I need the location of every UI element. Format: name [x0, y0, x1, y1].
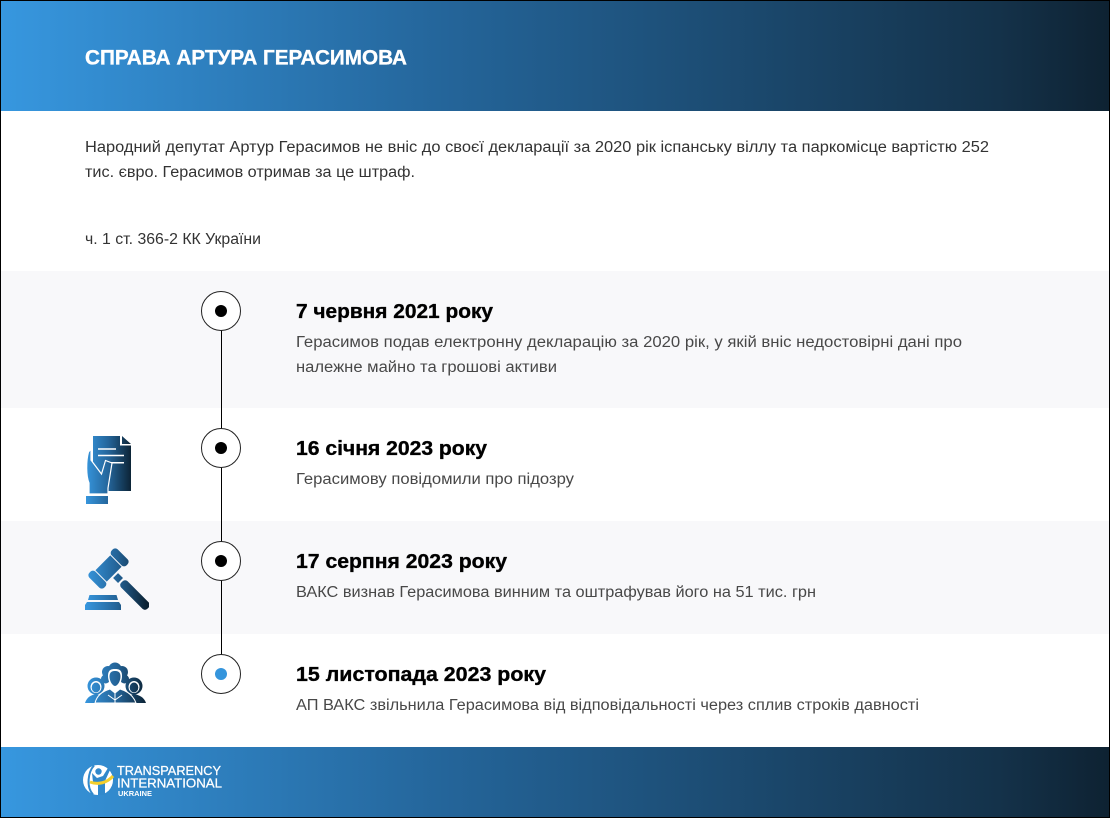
title: СПРАВА АРТУРА ГЕРАСИМОВА	[85, 46, 407, 70]
description 3: ВАКС визнав Герасимова винним та оштрафував його на 51 тис. грн	[296, 584, 816, 601]
intro text	[85, 139, 989, 181]
intro text: Народний депутат Артур Герасимов не вніс до своєї декларації за 2020 рік іспанську віллу та паркомісце вартістю 252	[85, 139, 989, 156]
event: 17 August 2023	[83, 542, 816, 613]
legal reference: ч. 1 ст. 366-2 КК України	[85, 231, 261, 248]
marker 2	[202, 428, 240, 468]
timeline line	[220, 311, 222, 674]
icon: group of judges	[85, 662, 146, 703]
event: 15 November 2023	[85, 654, 919, 714]
marker 1	[202, 292, 240, 330]
logo: Transparency International Ukraine: TRANSPARENCY	[117, 764, 222, 778]
description 1	[296, 334, 962, 376]
marker 3	[202, 542, 240, 580]
logo: Transparency International Ukraine	[83, 764, 222, 798]
date 2: 16 січня 2023 року	[296, 438, 488, 460]
logo: Transparency International Ukraine: INTERNATIONAL	[117, 776, 222, 790]
event: 7 June 2021	[202, 292, 962, 376]
marker 4	[202, 654, 240, 694]
event: 16 January 2023	[86, 428, 574, 504]
logo: Transparency International Ukraine: UKRAINE	[118, 791, 152, 798]
icon: document in hand	[86, 436, 131, 504]
header band	[1, 1, 1109, 111]
icon: gavel	[85, 548, 149, 610]
description 2: Герасимову повідомили про підозру	[296, 471, 574, 488]
row backgrounds	[1, 271, 1109, 634]
date 3: 17 серпня 2023 року	[296, 551, 508, 573]
date 4: 15 листопада 2023 року	[296, 664, 547, 686]
date 1: 7 червня 2021 року	[296, 301, 494, 323]
description 1: Герасимов подав електронну декларацію за 2020 рік, у якій вніс недостовірні дані про	[296, 334, 962, 351]
description 4: АП ВАКС звільнила Герасимова від відповідальності через сплив строків давності	[296, 697, 919, 714]
description 1: належне майно та грошові активи	[296, 359, 557, 376]
intro text: тис. євро. Герасимов отримав за це штраф.	[85, 164, 415, 181]
footer band	[1, 747, 1109, 817]
